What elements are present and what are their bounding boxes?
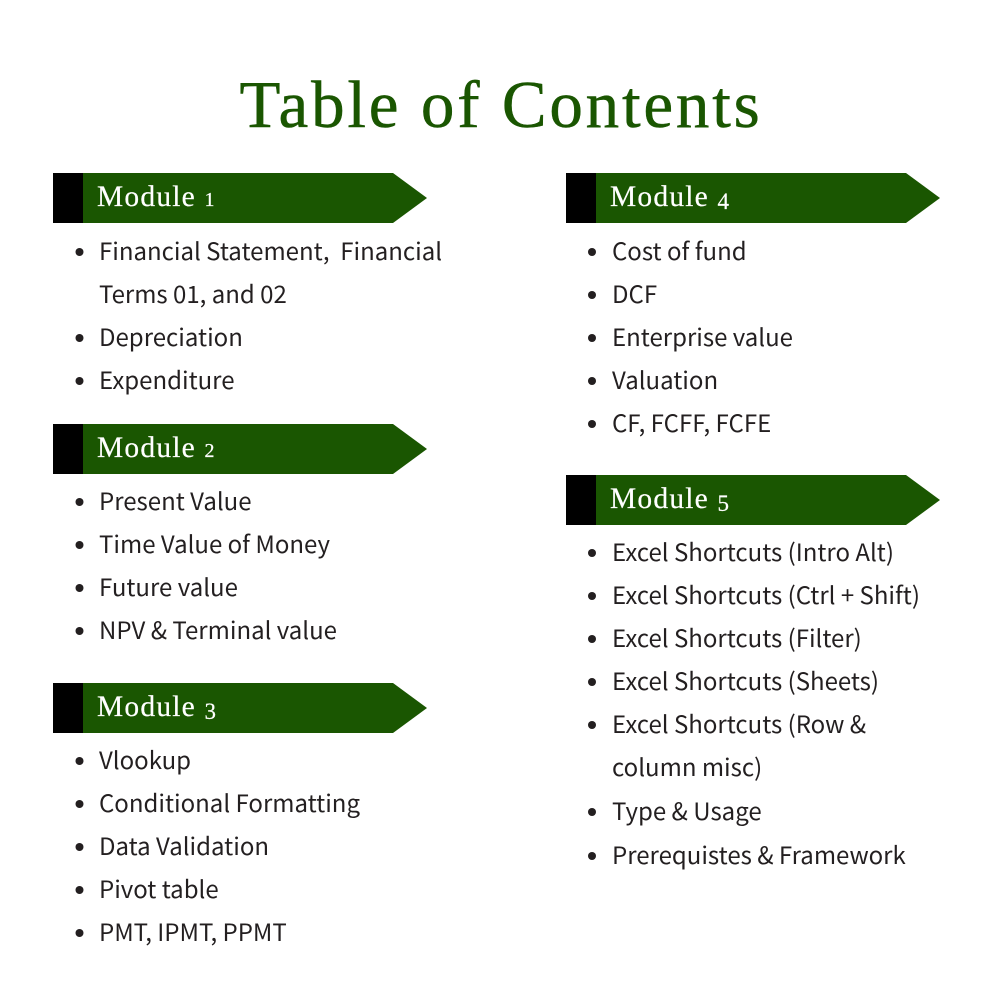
banner: module 3: 3	[205, 699, 217, 724]
list: module 3 topics	[76, 741, 360, 948]
list: module 1 topics: Expenditure	[99, 361, 235, 396]
list: module 2 topics: NPV & Terminal value	[99, 611, 337, 646]
list: module 5 topics: Prerequistes & Framework	[612, 836, 906, 871]
panel: module 2	[53, 424, 427, 646]
list: module 4 topics	[588, 232, 793, 439]
list: module 2 topics: Present Value	[99, 482, 252, 517]
list: module 4 topics: Cost of fund	[612, 232, 747, 267]
banner: module 4: Module	[610, 181, 709, 213]
banner: module 1	[53, 173, 427, 223]
list: module 5 topics: column misc)	[612, 748, 762, 783]
list: module 1 topics: Depreciation	[99, 318, 243, 353]
title: Table of Contents	[240, 68, 762, 142]
list: module 5 topics: Excel Shortcuts (Sheets)	[612, 662, 879, 697]
list: module 4 topics: Valuation	[612, 361, 718, 396]
list: module 3 topics: Data Validation	[99, 827, 269, 862]
list: module 2 topics: Time Value of Money	[99, 525, 330, 560]
list: module 3 topics: PMT, IPMT, PPMT	[99, 913, 287, 948]
banner: module 2	[53, 424, 427, 474]
banner: module 5: Module	[610, 483, 709, 515]
panel: module 5	[566, 475, 940, 871]
banner: module 5	[566, 475, 940, 525]
list: module 4 topics: DCF	[612, 275, 657, 310]
panel: module 1	[53, 173, 442, 396]
list: module 1 topics	[76, 232, 442, 396]
banner: module 3: Module	[97, 691, 196, 723]
list: module 5 topics: Excel Shortcuts (Ctrl + Shift)	[612, 576, 920, 611]
list: module 5 topics	[588, 533, 920, 871]
list: module 5 topics: Type & Usage	[612, 792, 762, 827]
list: module 5 topics: Excel Shortcuts (Intro Alt)	[612, 533, 894, 568]
banner: module 1: Module 1	[97, 181, 216, 213]
banner: module 5: 5	[718, 491, 730, 516]
list: module 3 topics: Vlookup	[99, 741, 191, 776]
banner: module 4: 4	[718, 189, 730, 214]
panel: module 3	[53, 683, 427, 948]
list: module 1 topics: Terms 01, and 02	[99, 275, 287, 310]
list: module 1 topics: Financial Statement, Financial	[99, 232, 442, 267]
list: module 2 topics: Future value	[99, 568, 238, 603]
list: module 2 topics	[76, 482, 337, 646]
list: module 5 topics: Excel Shortcuts (Row &	[612, 705, 866, 740]
banner: module 2: Module 2	[97, 432, 216, 464]
list: module 3 topics: Pivot table	[99, 870, 219, 905]
list: module 3 topics: Conditional Formatting	[99, 784, 360, 819]
banner: module 3	[53, 683, 427, 733]
banner: module 4	[566, 173, 940, 223]
list: module 5 topics: Excel Shortcuts (Filter)	[612, 619, 862, 654]
list: module 4 topics: CF, FCFF, FCFE	[612, 404, 771, 439]
list: module 4 topics: Enterprise value	[612, 318, 793, 353]
panel: module 4	[566, 173, 940, 439]
